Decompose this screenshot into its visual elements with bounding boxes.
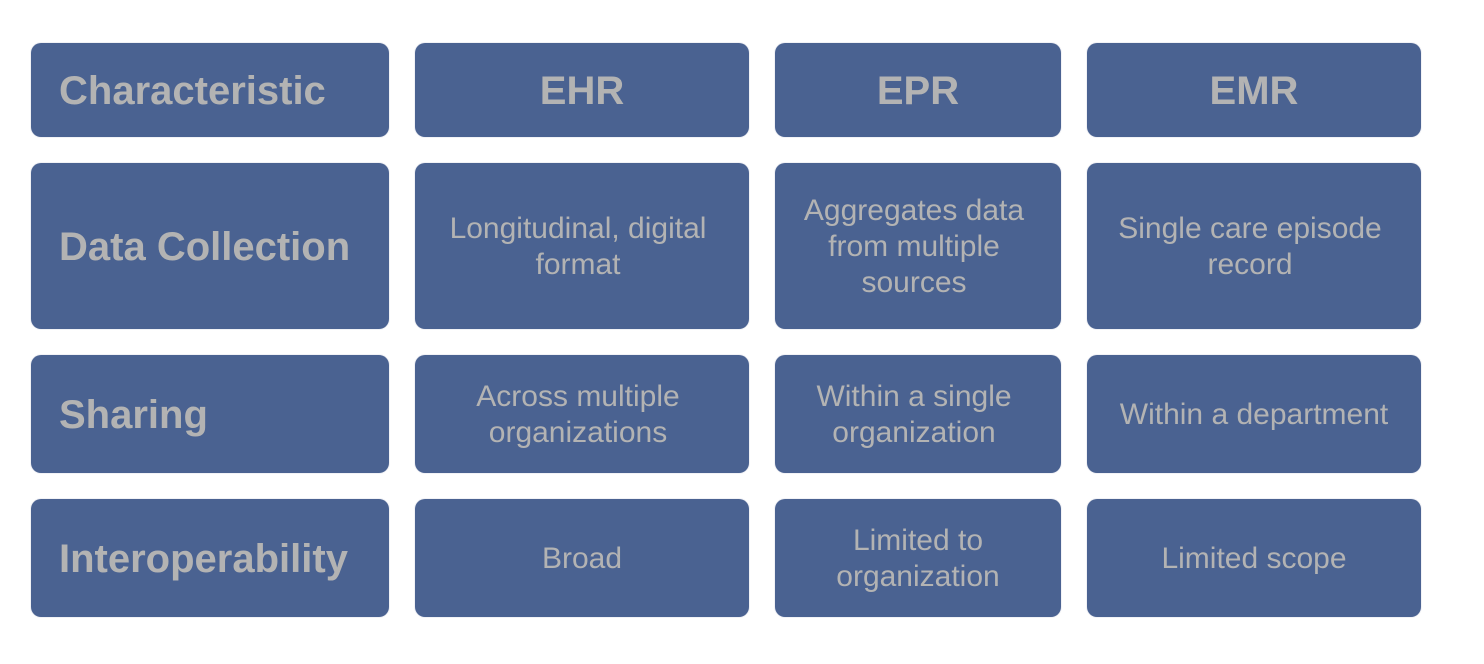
header: EPR	[775, 43, 1061, 137]
EPR sharing	[775, 355, 1061, 473]
EHR sharing: Across multiple	[476, 380, 680, 413]
EMR interoperability: Limited scope	[1161, 542, 1347, 575]
EPR data collection: Aggregates data	[804, 194, 1024, 227]
EHR interoperability	[415, 499, 749, 617]
EPR sharing: Within a single	[816, 380, 1012, 413]
header: EHR: EHR	[540, 69, 624, 113]
header: EPR: EPR	[877, 69, 959, 113]
EHR sharing	[415, 355, 749, 473]
EPR interoperability: Limited to	[853, 524, 983, 557]
EPR data collection: sources	[861, 266, 967, 299]
header: EHR	[415, 43, 749, 137]
row label: Sharing: Sharing	[59, 393, 208, 437]
row label: Data Collection	[31, 163, 389, 329]
EPR interoperability: organization	[836, 560, 1000, 593]
header: EMR: EMR	[1210, 69, 1298, 113]
header: Characteristic	[31, 43, 389, 137]
EMR sharing	[1087, 355, 1421, 473]
row label: Data Collection: Data Collection	[59, 225, 350, 269]
EMR interoperability	[1087, 499, 1421, 617]
EPR data collection	[775, 163, 1061, 329]
EHR sharing: organizations	[489, 416, 667, 449]
row label: Interoperability: Interoperability	[59, 537, 348, 581]
header: Characteristic: Characteristic	[59, 69, 326, 113]
EHR data collection: format	[535, 248, 621, 281]
EPR data collection: from multiple	[828, 230, 1000, 263]
EHR interoperability: Broad	[542, 542, 622, 575]
row label: Sharing	[31, 355, 389, 473]
EPR sharing: organization	[832, 416, 996, 449]
EHR data collection	[415, 163, 749, 329]
EPR interoperability	[775, 499, 1061, 617]
EMR data collection	[1087, 163, 1421, 329]
EHR data collection: Longitudinal, digital	[450, 212, 706, 245]
EMR sharing: Within a department	[1120, 398, 1388, 431]
header: EMR	[1087, 43, 1421, 137]
EMR data collection: Single care episode	[1118, 212, 1382, 245]
row label: Interoperability	[31, 499, 389, 617]
EMR data collection: record	[1207, 248, 1293, 281]
